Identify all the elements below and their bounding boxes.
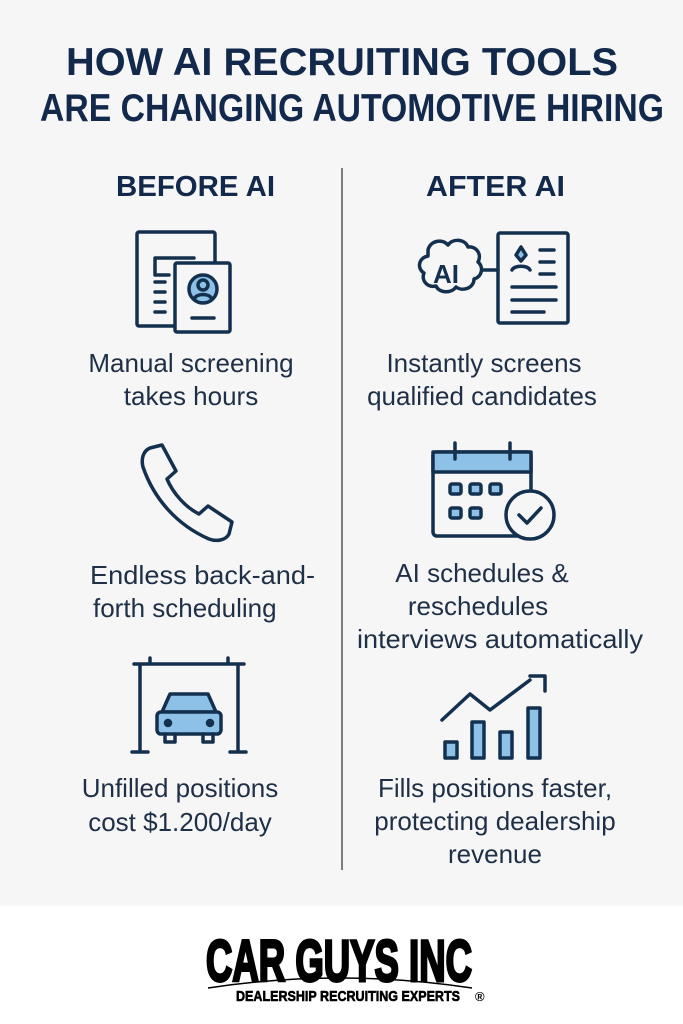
title xyxy=(40,41,664,130)
text: AI schedules: interviews automatically xyxy=(357,624,643,654)
icon: calendar xyxy=(433,443,554,539)
text: unfilled positions xyxy=(82,773,278,837)
logo: car guys inc: ® xyxy=(475,989,485,1004)
text: manual screening: takes hours xyxy=(124,381,258,411)
text: AI schedules xyxy=(357,558,643,654)
text: instantly screens: Instantly screens xyxy=(386,348,582,378)
icon: phone xyxy=(142,445,232,540)
text: fills positions faster xyxy=(374,773,616,869)
text: manual screening: Manual screening xyxy=(88,348,294,378)
icon: garage car xyxy=(132,658,246,752)
heading: before AI: BEFORE AI xyxy=(116,171,275,203)
icon: AI cloud + resume: AI xyxy=(433,259,459,289)
text: instantly screens: qualified candidates xyxy=(367,381,597,411)
text: fills positions faster: protecting dealership xyxy=(374,806,616,836)
logo: car guys inc: CAR GUYS INC xyxy=(206,929,472,994)
logo: car guys inc xyxy=(206,929,485,1005)
text: unfilled positions: cost $1.200/day xyxy=(88,807,272,837)
text: instantly screens xyxy=(367,348,597,411)
text: manual screening xyxy=(88,348,294,411)
text: endless scheduling: Endless back-and- xyxy=(90,560,315,590)
heading: after AI: AFTER AI xyxy=(426,171,565,203)
text: fills positions faster: revenue xyxy=(448,839,542,869)
icon: documents xyxy=(137,232,230,332)
text: unfilled positions: Unfilled positions xyxy=(82,773,278,803)
text: endless scheduling xyxy=(90,560,315,623)
icon: AI cloud + resume xyxy=(419,233,568,323)
text: fills positions faster: Fills positions faster, xyxy=(378,773,612,803)
text: endless scheduling: forth scheduling xyxy=(93,593,277,623)
text: AI schedules: reschedules xyxy=(408,591,548,621)
title: HOW AI RECRUITING TOOLS xyxy=(66,41,618,84)
icon: growth chart xyxy=(442,676,545,758)
logo: car guys inc: DEALERSHIP RECRUITING EXPERTS xyxy=(236,988,460,1005)
text: AI schedules: AI schedules & xyxy=(395,558,569,588)
